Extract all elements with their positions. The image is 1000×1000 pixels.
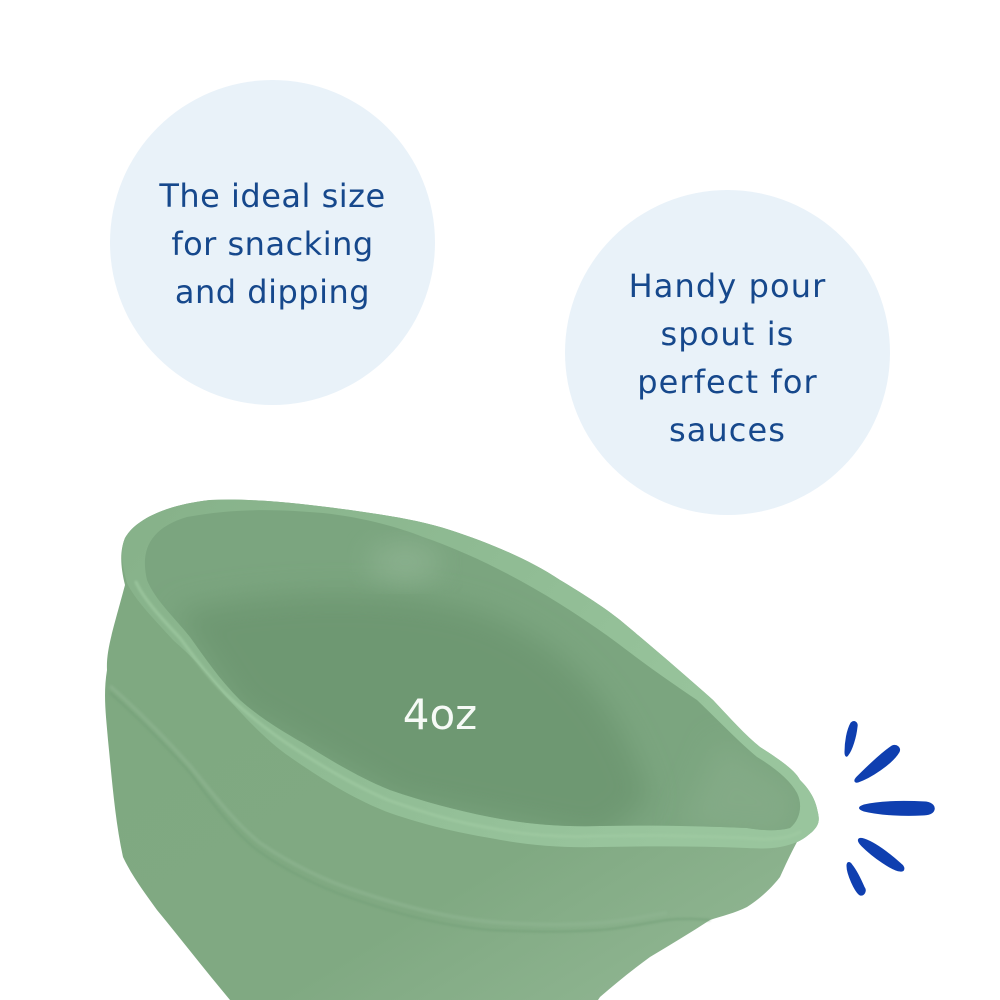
interior highlight — [378, 546, 430, 580]
callout text: pour spout: perfect for — [637, 363, 818, 401]
rim — [122, 500, 819, 848]
interior floor — [192, 598, 640, 826]
callout text: pour spout: spout is — [661, 315, 794, 353]
callout text: ideal size — [159, 177, 386, 311]
callout: pour spout — [565, 190, 890, 515]
interior of bowl — [145, 510, 800, 830]
callout text: ideal size: for snacking — [171, 225, 374, 263]
illustration: green bowl — [105, 500, 935, 1000]
callout text: pour spout — [629, 267, 826, 449]
interior spout lighter — [722, 782, 768, 812]
rim highlight — [136, 582, 800, 839]
bowl body — [100, 490, 830, 1000]
callout: ideal size — [110, 80, 435, 405]
callout text: ideal size: and dipping — [175, 273, 370, 311]
callout text: pour spout: Handy pour — [629, 267, 826, 305]
size label: 4oz — [403, 690, 477, 739]
callout text: pour spout: sauces — [669, 411, 786, 449]
icon: blue burst marks — [845, 722, 934, 895]
callout text: ideal size: The ideal size — [159, 177, 386, 215]
body band shading — [110, 693, 710, 932]
